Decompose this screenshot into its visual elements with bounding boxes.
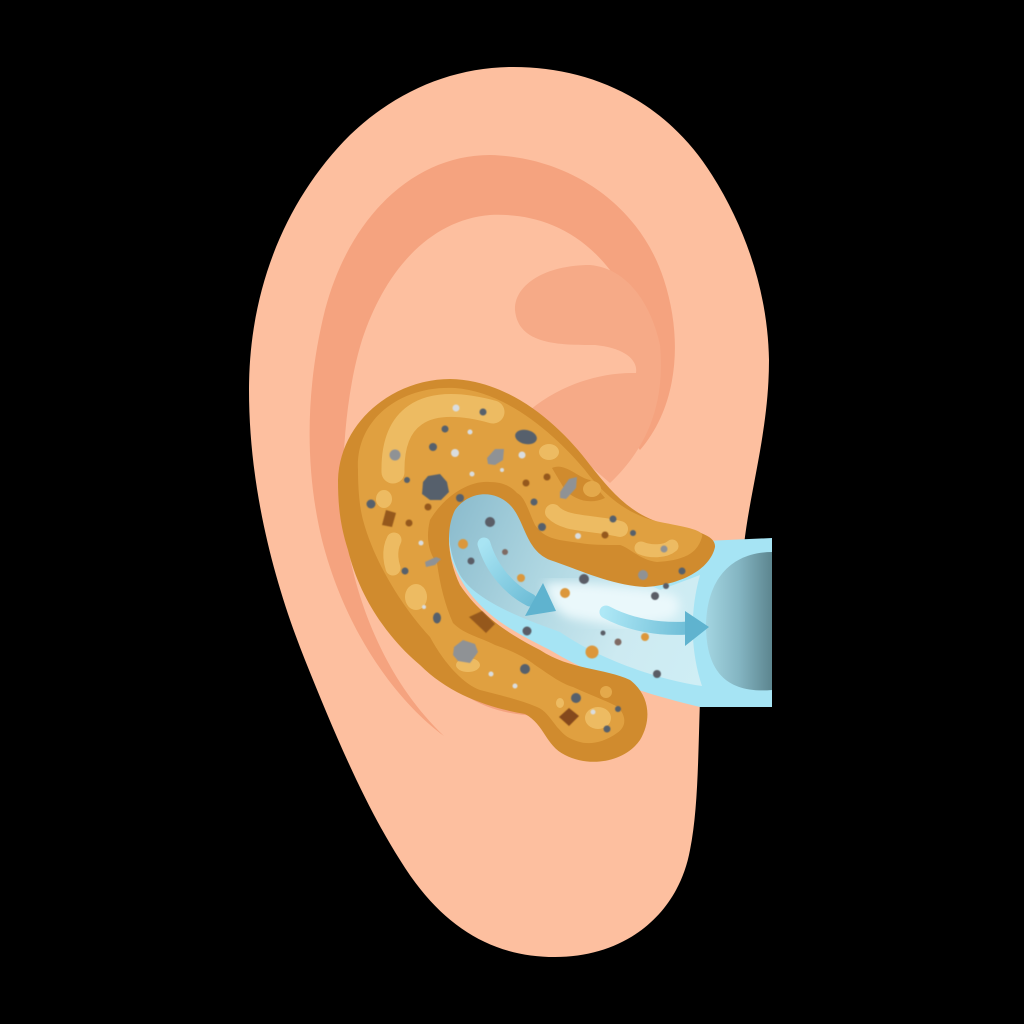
debris: brown particles (382, 474, 608, 726)
arrow: flow one (484, 544, 556, 616)
wax outer dark layer (338, 379, 715, 762)
ear canal tube (449, 493, 772, 707)
antihelix fold (515, 265, 661, 483)
debris: dark particles (366, 408, 686, 732)
ear wax mass (338, 379, 715, 762)
helix fold (310, 155, 675, 736)
bright water centre (545, 582, 679, 624)
debris in water (458, 517, 669, 678)
wax highlights (391, 406, 672, 568)
grey end cap (706, 552, 772, 690)
lower shadow under wax (465, 695, 545, 716)
debris: white specks (418, 404, 596, 714)
wax middle layer (358, 388, 702, 743)
debris: grey particles (390, 449, 668, 663)
wax dark patch (552, 467, 605, 501)
water body (449, 493, 702, 686)
arrow: flow two (606, 611, 709, 646)
ear outer shape (249, 67, 769, 957)
tube outer water (449, 495, 772, 707)
